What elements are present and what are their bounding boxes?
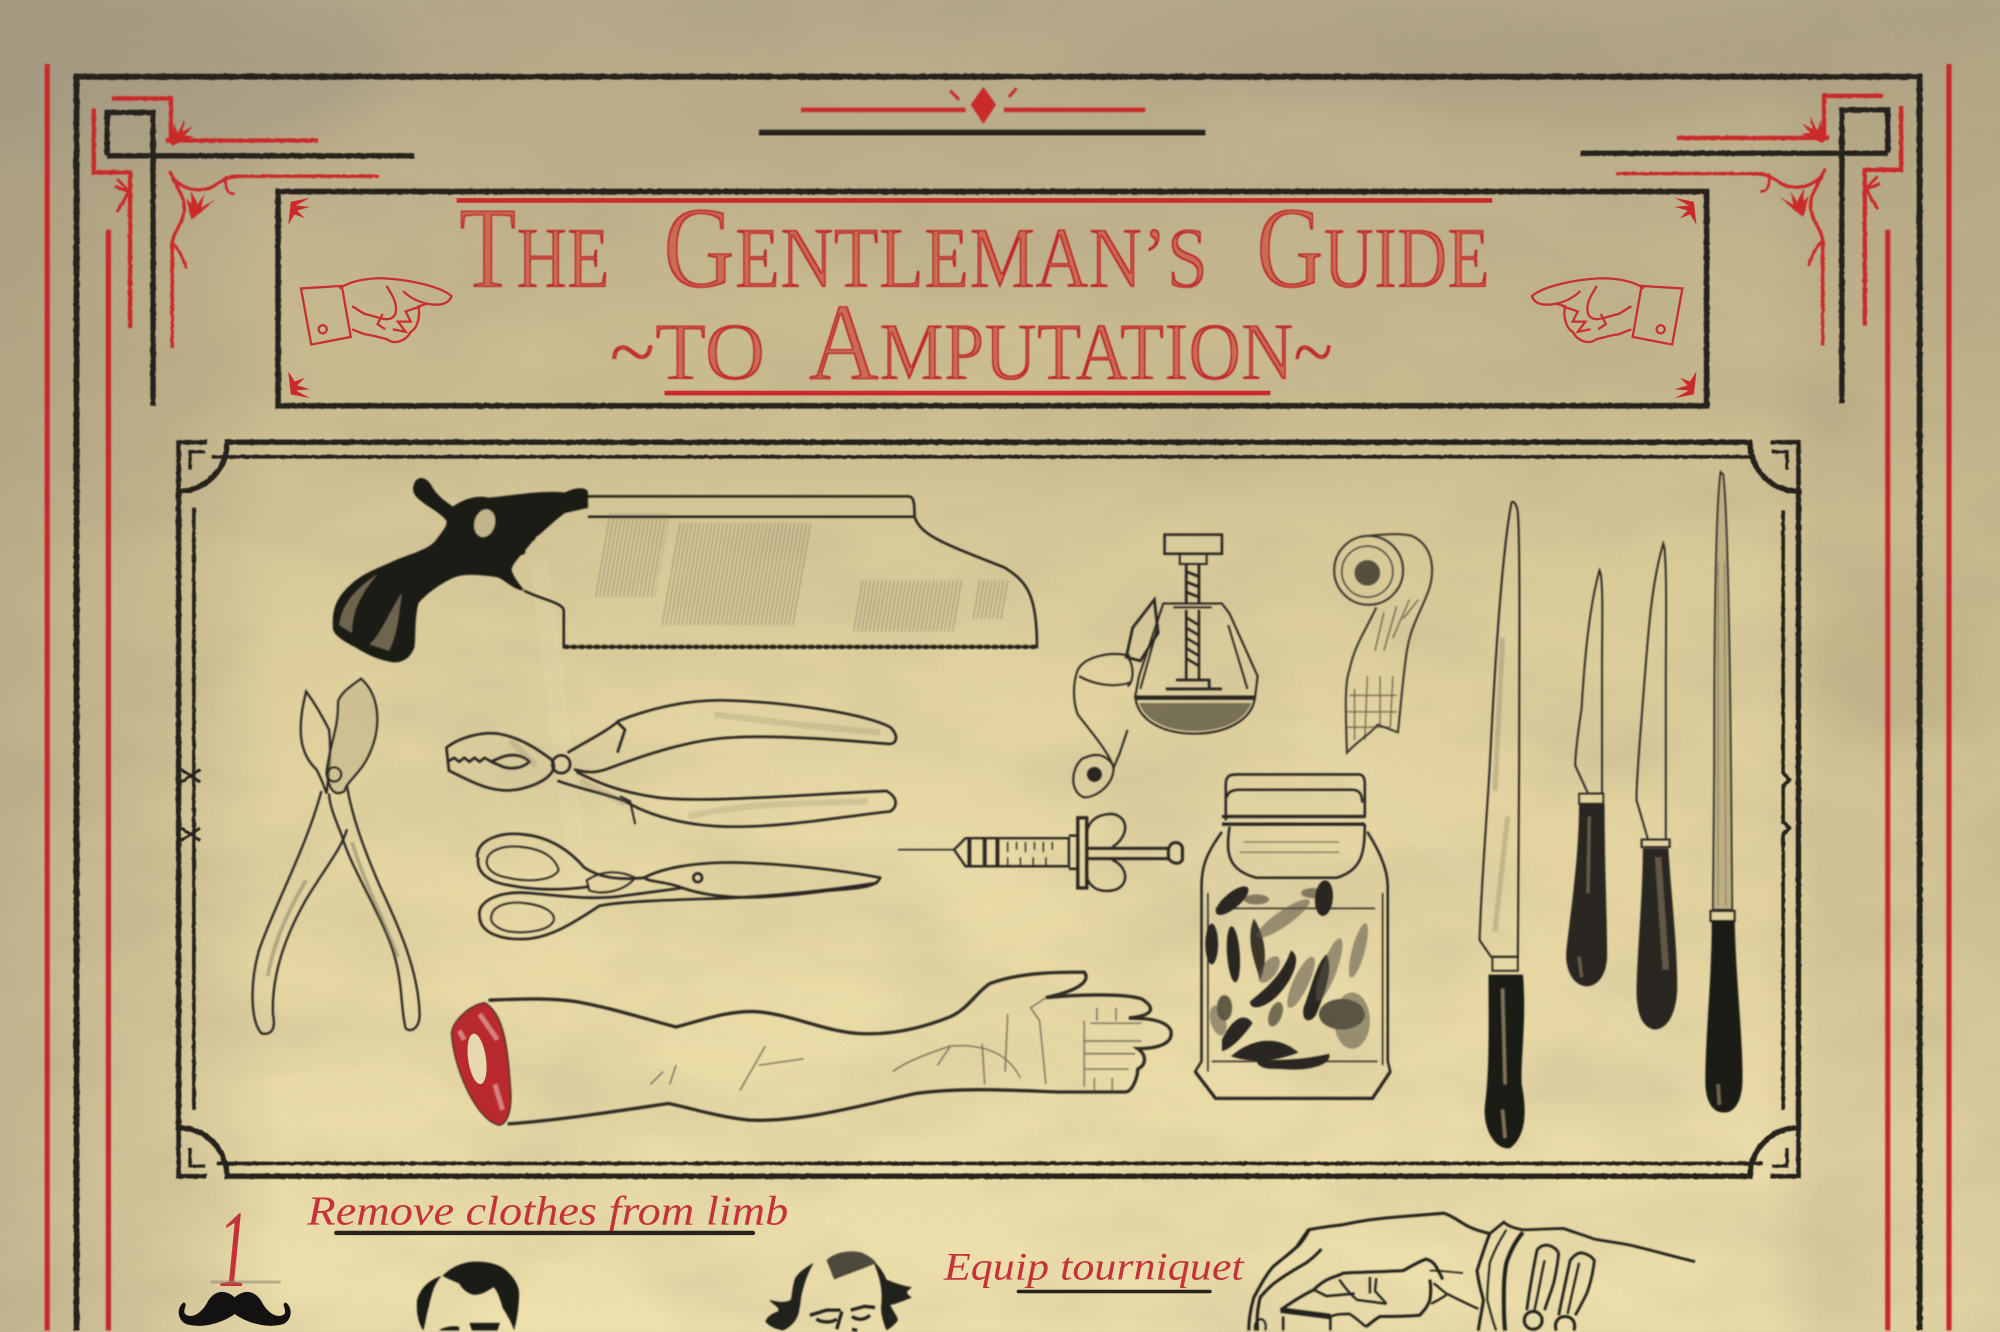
jar of leeches [1195,774,1390,1098]
title box border [278,192,1707,406]
knives [1480,472,1742,1148]
knife two [1566,570,1607,986]
leeches [1205,880,1365,1070]
title line one: THE [459,185,632,313]
syringe [898,814,1182,891]
pliers: vertical bone cutters [253,679,420,1034]
scissors [477,834,880,939]
saw [333,478,1037,662]
icon: pointing hand left [301,278,452,345]
portrait one [417,1262,519,1331]
numeral: 1 [218,1188,249,1310]
icon: pointing hand right [1532,278,1682,345]
knife three [1636,544,1677,1030]
title line one: GENTLEMAN’S [663,185,1289,313]
panel border [179,442,1798,1176]
sharpening steel [1705,472,1742,1113]
portrait two [765,1251,912,1331]
tourniquet [1073,535,1258,797]
title panel [278,185,1707,406]
knife one [1480,502,1525,1148]
title line two: ~TO [610,306,762,397]
severed arm [452,972,1171,1125]
hand applying tourniquet [1249,1213,1695,1331]
corner ornament: top right [1580,96,1901,403]
instruments panel [179,442,1798,1176]
icon: moustache [179,1292,291,1326]
title rules [457,200,1492,393]
saw blade [524,496,1037,647]
arm stump [452,1003,511,1125]
forceps [446,700,896,827]
title line two: AMPUTATION~ [809,281,1388,403]
step two heading: Equip tourniquet [943,1245,1245,1289]
bandage roll [1334,534,1432,753]
corner ornament: top left [94,98,415,406]
title line one: GUIDE [1256,185,1531,313]
saw handle [333,478,588,662]
step number 1 with moustache [179,1188,291,1326]
title box corner flourishes [288,198,1696,398]
step one heading: Remove clothes from limb [306,1189,788,1234]
top centre ornament [759,87,1205,133]
